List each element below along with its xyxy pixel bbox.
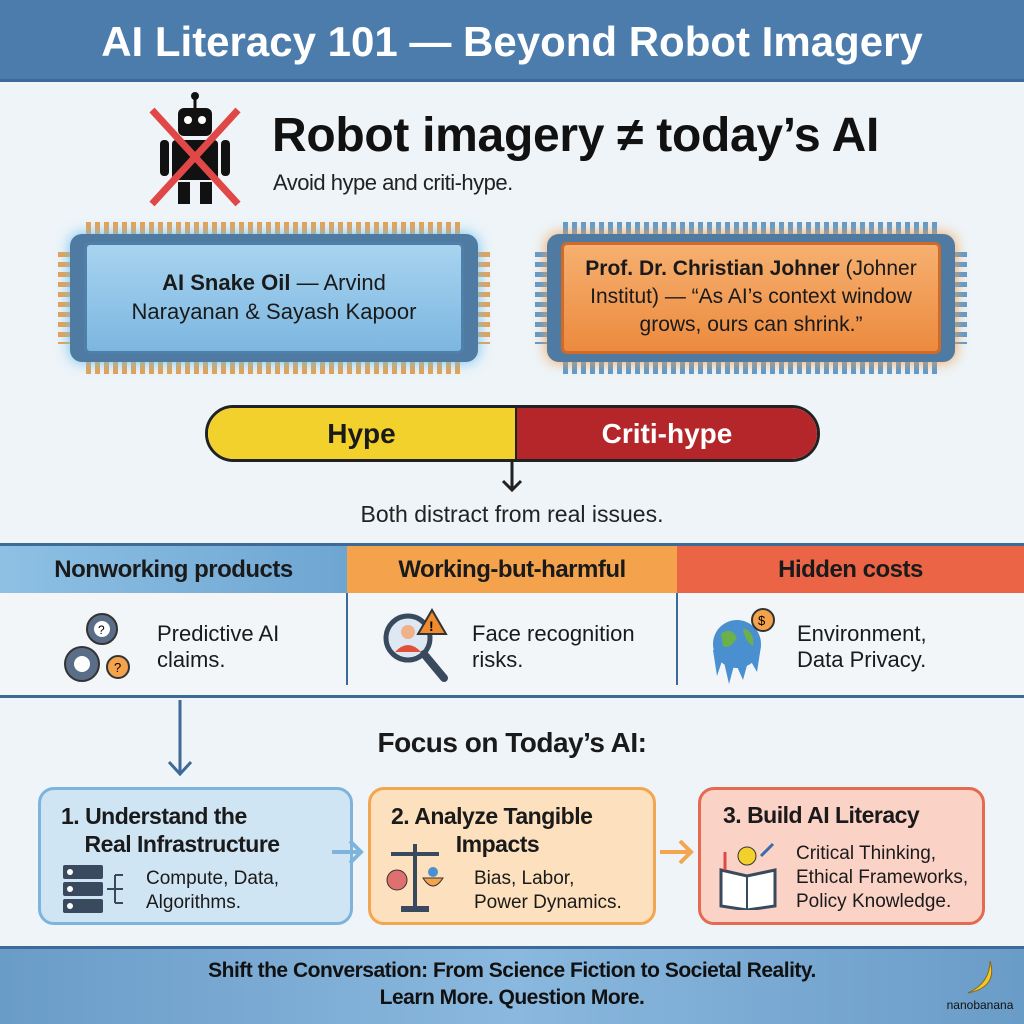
text: predictive: Predictive AI (157, 621, 279, 646)
step 2 title: Impacts (456, 831, 539, 857)
logo: banana (947, 960, 1014, 1012)
chip: Johner quote (535, 222, 967, 374)
text: environment (797, 621, 927, 672)
step 3 title: 3. Build AI Literacy (723, 802, 919, 828)
icon: gears: ? (114, 660, 121, 675)
icon: servers (63, 865, 123, 913)
footer text: Learn More. Question More. (380, 986, 644, 1009)
icon: crossed robot (150, 92, 240, 206)
step 2 title: 2. Analyze Tangible (391, 803, 592, 829)
heading: Robot imagery ≠ today’s AI (272, 109, 879, 162)
icon: book with bulb (720, 843, 776, 910)
icon: scales (386, 844, 444, 912)
text: face recognition: Face recognition (472, 621, 635, 646)
text: book citation: AI Snake Oil — Arvind Narayanan & Sayash Kapoor (132, 270, 416, 324)
step 1 box (38, 787, 353, 925)
header: harmful (347, 546, 677, 593)
icon: melting globe: $ (758, 613, 766, 628)
step 3 text: Ethical Frameworks, (796, 867, 968, 888)
header: harmful: Working-but-harmful (398, 556, 626, 583)
logo: banana: nanobanana (947, 998, 1013, 1012)
step 3 text: Critical Thinking, (796, 843, 936, 864)
hype segment: Hype (327, 418, 396, 449)
step 2 text: Power Dynamics. (474, 892, 622, 913)
step 3 text (796, 843, 968, 912)
step 1 text: Compute, Data, (146, 868, 279, 889)
icon: magnifier (384, 608, 448, 682)
step 1 title: Real Infrastructure (85, 831, 280, 857)
step 3 text: Policy Knowledge. (796, 891, 951, 912)
criti-hype segment (515, 408, 817, 459)
text: environment: Environment, (797, 621, 927, 646)
step 1 text (146, 868, 279, 913)
step 2 text: Bias, Labor, (474, 868, 574, 889)
title: AI Literacy 101 — Beyond Robot Imagery (101, 18, 923, 65)
header: hidden costs (677, 546, 1024, 593)
arrow: 1 to 2 (332, 841, 364, 863)
header: nonworking (0, 546, 347, 593)
heading: focus: Focus on Today’s AI: (378, 727, 646, 758)
text: environment: Data Privacy. (797, 647, 926, 672)
footer (0, 946, 1024, 1024)
step 2 text (474, 868, 622, 913)
icon: gears: ? (98, 623, 105, 637)
step 1 title: 1. Understand the (61, 803, 247, 829)
text: face recognition (472, 621, 635, 672)
step 3 box (698, 787, 985, 925)
hype spectrum bar (205, 405, 820, 462)
subtitle: Avoid hype and criti-hype. (273, 170, 513, 195)
header: hidden costs: Hidden costs (778, 556, 923, 583)
text: quote: Prof. Dr. Christian Johner (Johner Institut) — “As AI’s context window grows, ours can shrink.” (585, 257, 917, 336)
text: predictive: claims. (157, 647, 225, 672)
header bar (0, 0, 1024, 82)
arrow: 2 to 3 (660, 840, 694, 864)
step 1 title (61, 803, 280, 857)
icon: gears (64, 613, 130, 682)
text: predictive (157, 621, 279, 672)
text: face recognition: risks. (472, 647, 523, 672)
chip: AI Snake Oil (58, 222, 490, 374)
panel: three problem categories (0, 543, 1024, 698)
step 2 title (391, 803, 592, 857)
arrow: down to steps (168, 700, 192, 776)
header: nonworking: Nonworking products (54, 556, 293, 583)
step 1 text: Algorithms. (146, 892, 241, 913)
footer text: Shift the Conversation: From Science Fiction to Societal Reality. (208, 959, 816, 982)
footer text (208, 959, 816, 1009)
caption: Both distract from real issues. (361, 501, 663, 527)
step 2 box (368, 787, 656, 925)
icon: magnifier: ! (429, 618, 434, 634)
hype segment (208, 408, 515, 459)
icon: melting globe (713, 608, 775, 684)
criti-hype segment: Criti-hype (602, 418, 732, 449)
arrow: down from bar (502, 462, 522, 492)
